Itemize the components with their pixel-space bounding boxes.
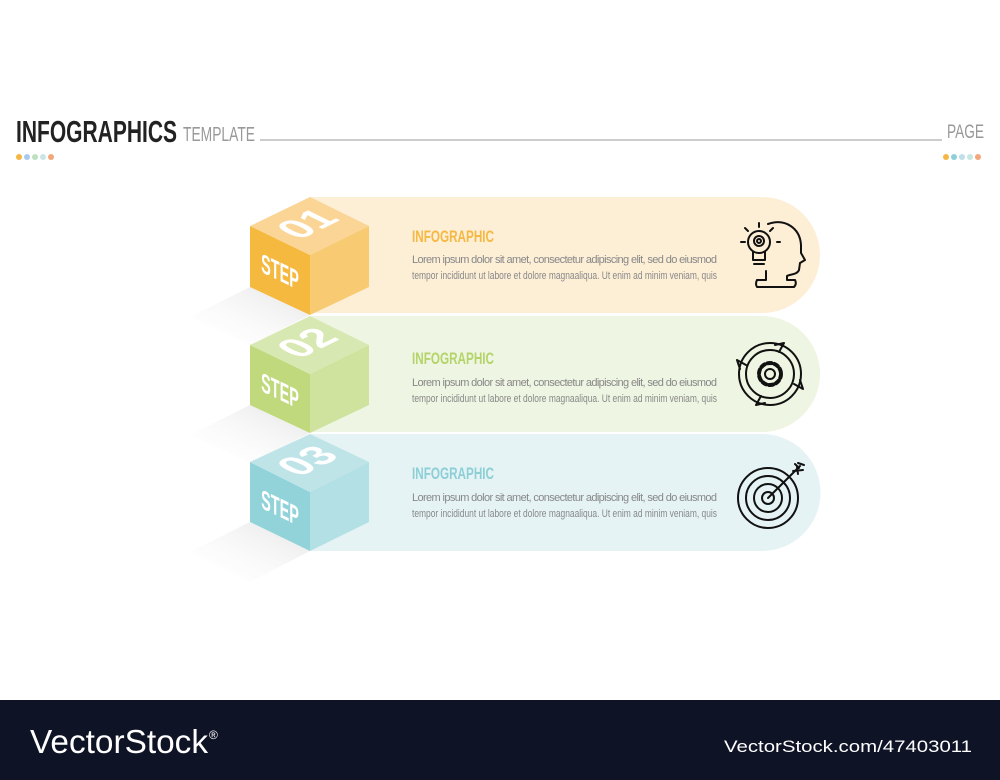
step 1 band xyxy=(310,197,820,313)
text block 1: Lorem ipsum dolor sit amet, consectetur adipiscing elit, sed do eiusmod xyxy=(412,254,717,266)
step 3 band xyxy=(310,434,820,551)
footer url: VectorStock.com/47403011 xyxy=(724,737,972,756)
cube: step 03 xyxy=(250,434,369,551)
text block 2: Lorem ipsum dolor sit amet, consectetur adipiscing elit, sed do eiusmod xyxy=(412,377,717,389)
text block 3 xyxy=(412,464,717,520)
text block 1: INFOGRAPHIC xyxy=(412,227,494,246)
cube: step 02 xyxy=(250,316,369,433)
cube: step 01 xyxy=(250,197,369,315)
dots right xyxy=(943,154,981,160)
text block 3: INFOGRAPHIC xyxy=(412,464,494,483)
text block 2: INFOGRAPHIC xyxy=(412,349,494,368)
text block 1: tempor incididunt ut labore et dolore magnaaliqua. Ut enim ad minim veniam, quis xyxy=(412,270,717,282)
shadows xyxy=(190,287,310,582)
icon: gear with cycle arrows xyxy=(737,343,803,405)
footer xyxy=(0,700,1000,780)
step 2 band xyxy=(310,316,820,432)
icon: head with lightbulb xyxy=(741,222,805,287)
text block 3: tempor incididunt ut labore et dolore magnaaliqua. Ut enim ad minim veniam, quis xyxy=(412,508,717,520)
title: INFOGRAPHICS xyxy=(16,114,177,149)
page label: PAGE xyxy=(947,122,984,143)
cube: step 03: 03 xyxy=(265,440,349,481)
text block 2 xyxy=(412,349,717,405)
icon: target with arrow xyxy=(738,463,804,528)
cube: step 01: STEP xyxy=(261,248,299,296)
header xyxy=(16,114,984,160)
text block 3: Lorem ipsum dolor sit amet, consectetur adipiscing elit, sed do eiusmod xyxy=(412,492,717,504)
subtitle: TEMPLATE xyxy=(183,124,255,146)
cube: step 03: STEP xyxy=(261,484,299,532)
text block 2: tempor incididunt ut labore et dolore magnaaliqua. Ut enim ad minim veniam, quis xyxy=(412,393,717,405)
footer logo: VectorStock xyxy=(30,723,208,760)
dots left xyxy=(16,154,54,160)
cube: step 01: 01 xyxy=(265,203,349,244)
cube: step 02: 02 xyxy=(265,322,349,363)
cube: step 02: STEP xyxy=(261,367,299,415)
text block 1 xyxy=(412,227,717,282)
registered mark: ® xyxy=(209,728,218,742)
